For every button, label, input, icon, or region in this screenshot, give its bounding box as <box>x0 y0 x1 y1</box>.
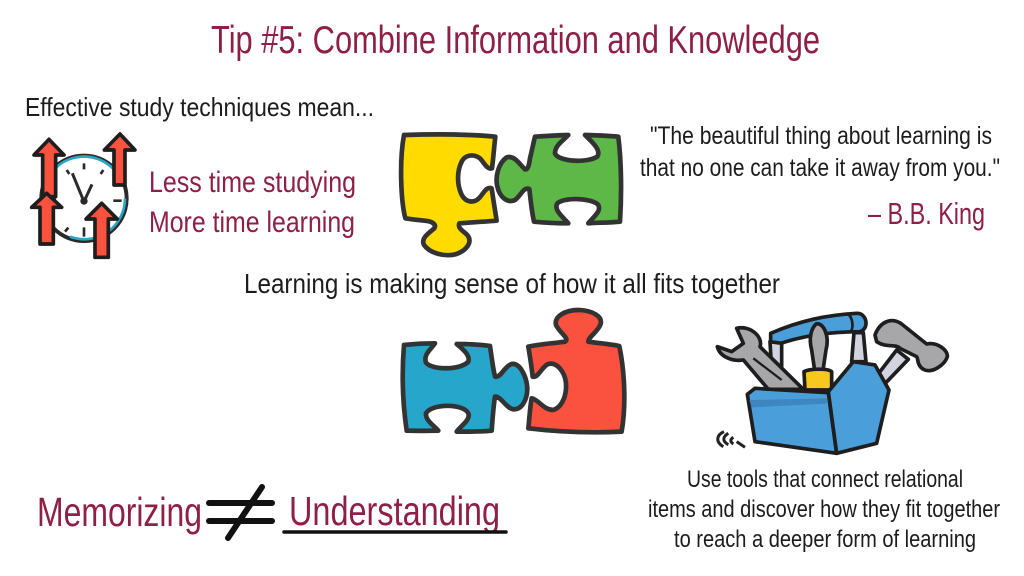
screwdriver <box>810 324 827 373</box>
title: Tip #5: Combine Information and Knowledge <box>211 19 820 62</box>
icon: toolbox with tools <box>717 313 947 453</box>
hammer <box>877 350 908 383</box>
tools caption: Use tools that connect relational <box>687 466 963 493</box>
not equal sign <box>209 487 272 538</box>
icon: clock with rising arrows <box>32 134 135 257</box>
memorizing: Memorizing <box>37 489 202 535</box>
handle <box>771 313 866 345</box>
puzzle pieces: top pair <box>401 134 621 255</box>
central statement: Learning is making sense of how it all fits together <box>244 268 780 299</box>
green puzzle piece <box>497 135 621 223</box>
intro text: Effective study techniques mean... <box>25 92 374 122</box>
more time learning: More time learning <box>149 206 355 239</box>
tools caption <box>648 466 1000 553</box>
quote attribution: – B.B. King <box>868 196 985 231</box>
red puzzle piece <box>528 310 624 432</box>
underline <box>284 530 506 534</box>
yellow puzzle piece <box>401 134 497 255</box>
quote <box>640 122 1000 182</box>
box <box>747 388 837 453</box>
puzzle pieces: bottom pair <box>403 310 624 432</box>
understanding: Understanding <box>289 488 500 534</box>
less time studying: Less time studying <box>149 166 356 199</box>
screw <box>718 432 745 447</box>
blue puzzle piece <box>403 343 527 432</box>
wrench <box>717 328 803 389</box>
